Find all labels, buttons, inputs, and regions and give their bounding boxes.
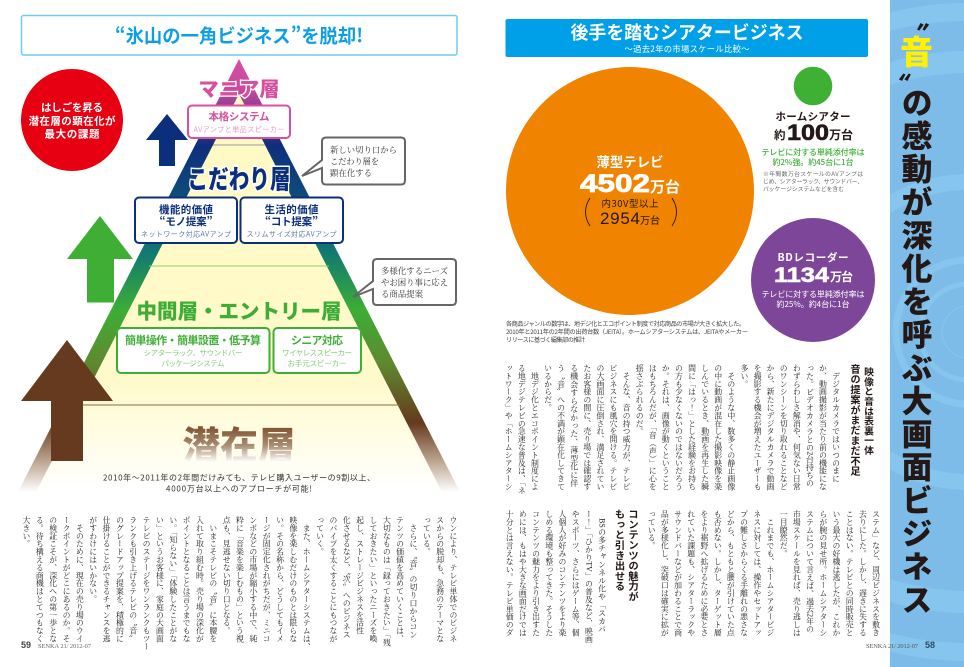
box: serious systems: 本格システム (208, 109, 270, 124)
circle: home theater: テレビに対する単純添付率は (762, 147, 864, 158)
body text: left page columns: また、ホームシアターシステムは、 (302, 524, 311, 650)
body text: left page columns: 化させるなど、〝次〟へのビジネス (342, 516, 351, 638)
red circle callout: はしごを昇る (41, 100, 103, 115)
body text: left page columns: の検証こそが、深化への第一歩とな (49, 516, 58, 642)
circle: bd recorder (751, 218, 875, 342)
title box: iceberg (22, 16, 457, 55)
body text: right page lower columns: れていた課題も、シアターラックや (687, 510, 696, 636)
body text: right page lower columns: サウンドバーなどが加わることで商 (674, 510, 683, 636)
page footer right (866, 640, 935, 650)
body text: right page upper columns: る地デジテレビの急速な普及は、「ネ (517, 364, 526, 494)
circle: flat tv: 4502 (580, 170, 650, 198)
body text: left page columns: い」というお客様に、家庭の大画面 (155, 516, 164, 642)
body text: right page lower columns: 一目瞭然だ。 (779, 510, 788, 557)
red circle callout: 潜在層の顕在化が (28, 114, 116, 128)
body text: right page lower columns: ステムについて言えば、過去2年の (806, 510, 815, 633)
box: lifestyle value: 生活的価値 (264, 202, 319, 217)
body text: right page lower columns after subheading: コンテンツの魅力をより引き出すた (532, 510, 541, 636)
circle: home theater: ホームシアター (776, 109, 850, 124)
headline remainder: の感動が深化を呼ぶ大画面ビジネス (894, 87, 940, 615)
callout: diverse needs (353, 259, 456, 305)
home theater footnote: じめ、シアターラック、サウンドバー、 (763, 176, 863, 186)
box: functional value: “モノ提案” (160, 214, 212, 229)
body text: right page upper columns: の大画面に圧倒され、満足されてい (596, 364, 605, 490)
page footer right: SENKA 21/ 2012-07 (866, 643, 919, 650)
chart source note: リリースに基づく編集部の推計 (506, 335, 585, 344)
circle: flat tv: 万台 (640, 212, 660, 227)
callout: diverse needs: る商品提案 (381, 288, 424, 300)
body text: right page upper columns: の中に動画が混在した撮影映像を楽 (714, 364, 723, 490)
circle: flat tv: 薄型テレビ (596, 151, 664, 171)
body text: right page upper columns: そのような中、数多くの静止画像 (727, 372, 736, 490)
body text: left page columns: ンポなどの市場が縮小する中で、純 (249, 516, 258, 642)
box: seniors: お手元スピーカー (288, 358, 346, 369)
body text: right page upper columns: か、動画撮影が当たり前の機能にな (818, 364, 828, 490)
body text: right page lower columns after subheading: めには、もはや大きな画面だけでは (518, 510, 527, 636)
chart source note: 2010年と2011年の2年間の出荷台数（JEITA）。ホームシアターシステムは、JEITAやメーカー (506, 327, 748, 336)
body text: left page columns: ランクも引き上げるテレビの〝音〟 (129, 516, 138, 642)
body text: left page columns: 大きい。 (22, 516, 31, 548)
circle: home theater: 万台 (829, 126, 853, 143)
subheading: image and sound: 音の提案がまだまだ不足 (848, 364, 863, 476)
chart source note (506, 319, 748, 344)
body text: right page lower columns: どから、もともと腰が引けていた点 (726, 510, 735, 636)
body text: left page columns: スからの脱却も、急務のテーマとな (436, 516, 445, 642)
box: lifestyle value: スリムサイズ対応AVアンプ (246, 230, 336, 240)
body text: left page columns: 点も、見逃せない切り口となる。 (222, 516, 231, 634)
title box: theater business (506, 19, 868, 57)
body text: left page columns: る。待ち構える商機はとてつもなく (35, 516, 44, 642)
title box: theater business: 後手を踏むシアタービジネス (570, 19, 804, 45)
circle: bd recorder: 万台 (830, 268, 853, 285)
page footer right: 58 (925, 640, 935, 650)
body text: right page upper columns: か。それは、画像が動くということ (661, 364, 670, 490)
subheading: image and sound (848, 364, 876, 476)
body text: right page lower columns: これまでも、ホームシアタービジ (766, 518, 775, 636)
body text: right page lower columns: ネスに対しては、操作やセットアッ (753, 510, 762, 636)
body text: right page upper columns (504, 364, 841, 494)
box: easy operation: 簡単操作・簡単設置・低予算 (125, 332, 261, 348)
body text: right page upper columns: る機会すらなかった、薄型化に伴 (570, 364, 579, 487)
circle: bd recorder: テレビに対する単純添付率は (762, 289, 864, 300)
box: easy operation: パッケージシステム (162, 358, 224, 369)
body text: left page columns: 入れて取り組む時。売り場の深化が (195, 516, 204, 642)
title box: theater business: ～過去2年の市場スケール比較～ (624, 43, 750, 55)
circle: flat tv: 内30V型以上 (602, 196, 659, 210)
closing quote mark: 〟 (893, 73, 930, 99)
body text: right page lower columns after subheading: 十分とは言えない。テレビ単価のダ (505, 510, 514, 636)
body text: left page columns: 粋に「音楽を楽しむもの」という視 (236, 516, 244, 642)
red circle callout (21, 69, 123, 171)
body text: right page lower columns: も否めない。しかし、ターゲット層 (713, 510, 722, 636)
body text: right page lower columns: っている。 (647, 510, 656, 550)
body text: right page upper columns: 多い。 (740, 364, 749, 388)
body text: left page columns: っていく。 (316, 516, 325, 556)
callout: diverse needs: 多様化するニーズ (381, 265, 448, 277)
callout: new angle: こだわり層を (330, 156, 379, 168)
body text: right page lower columns: 品が多様化し、突破口は確実に拡が (660, 510, 669, 636)
circle: home theater: 約2%強。約45台に1台 (772, 157, 854, 168)
layer heading: latent: 潜在層 (182, 415, 296, 470)
body text: right page lower columns after subheading: しめる環境も整ってきた。そうした (545, 510, 554, 636)
body text: right page lower columns: らが腕の見せ所。ホームシアターシ (819, 510, 828, 636)
body text: right page lower columns after subheading: ー！」「ひかりTV」の普及など、映画 (584, 510, 593, 643)
body text: left page columns: っている。 (422, 516, 431, 556)
body text: right page upper columns: を撮影する機会が増えたユーザーも (753, 364, 762, 490)
red circle callout: 最大の課題 (44, 126, 100, 142)
box: functional value: ネットワーク対応AVアンプ (141, 230, 231, 240)
body text: right page upper columns: の方も少なくないのではないだろう (674, 364, 683, 490)
body text: left page columns: そのために、現在の売り場のウイ (75, 524, 84, 642)
body text: left page columns: のパイプを太くすることにもつなが (329, 516, 338, 642)
box: easy operation (117, 328, 270, 373)
body text: right page upper columns: 揺さぶられるのだ。 (635, 364, 644, 435)
body text: left page columns: さらに、〝音〟の切り口からコン (409, 524, 418, 638)
body text: right page lower columns after subheading: 人個人が好みのコンテンツをより楽 (558, 510, 567, 636)
sidebar background (890, 0, 964, 667)
body text: right page upper columns: はもちろんだが、「音（声）」に心を (648, 364, 657, 490)
circle: flat tv (506, 67, 754, 315)
body text: right page lower columns after subheading: やスポーツ、さらにはゲーム等、個 (571, 510, 580, 636)
box: functional value (135, 198, 237, 243)
body text: left page columns (22, 516, 458, 650)
arrow: navy up (146, 114, 188, 166)
page footer left: SENKA 21/ 2012-07 (38, 643, 92, 650)
box: seniors: ワイヤレススピーカー (282, 348, 352, 358)
body text: right page upper columns: ビジネスにも風穴を開ける。テレビ (609, 364, 618, 490)
box: functional value: 機能的価値 (159, 202, 214, 217)
subheading: content appeal (612, 509, 641, 602)
body text: left page columns: 映像を楽しむだけのものとは限らな (289, 516, 298, 642)
home theater footnote (763, 169, 863, 193)
circle: home theater (762, 67, 864, 168)
body text: left page columns: テレビのステージをワンランクもツー (142, 516, 151, 650)
box: easy operation: シアターラック、サウンドバー (144, 348, 242, 358)
layer heading: kodawari: こだわり層 (188, 160, 290, 196)
circle: bd recorder: 1134 (774, 264, 829, 287)
body text: right page upper columns: のワンシーンを切り取れることなど (779, 364, 788, 490)
subheading: content appeal: もっと引き出せる (612, 509, 628, 591)
body text: left page columns: しておきたい」といったニーズを喚 (369, 516, 378, 642)
body text: left page columns: 大切なものは「録っておきたい」「残 (382, 516, 391, 646)
body text: right page upper columns: たお客様の間に、売り場では確認す (583, 364, 592, 490)
body text: right page lower columns: ことはない。テレビとの同時販売と (845, 510, 854, 636)
body text: right page lower columns (647, 510, 881, 636)
box: serious systems: AVアンプと単品スピーカー (194, 125, 284, 135)
body text: right page lower columns after subheading (505, 510, 607, 643)
body text: right page lower columns: いう最大の好機は逃したが、これか (832, 510, 841, 636)
body text: right page upper columns: わずらわしさ解消や、何気ない日常 (792, 364, 801, 490)
body text: left page columns: ポイントとなることは言うまでもな (182, 516, 191, 642)
box: seniors (274, 328, 361, 373)
body text: right page upper columns: いるからだ。 (544, 364, 553, 411)
page footer left: 59 (21, 640, 31, 650)
body text: right page upper columns: しんでいるとき、動画を再生した瞬 (701, 364, 710, 490)
latent layer note: 4000万台以上へのアプローチが可能! (166, 484, 312, 494)
body text: left page columns: い。その名称から、どうしてもイメ (276, 516, 285, 642)
sidebar title (892, 5, 940, 615)
highlighted word: sound: 音 (892, 35, 940, 68)
body text: right page lower columns: ステム」など、周辺ビジネスを敷き (872, 510, 881, 636)
body text: left page columns: い。「知らない」「体験したことがな (169, 516, 178, 642)
subheading: image and sound: 映像と音は表裏一体 (862, 367, 876, 455)
body text: right page lower columns: をより裾野へ拡げるために必要とさ (700, 510, 709, 636)
layer heading: mania: マニア層 (198, 73, 280, 102)
page footer left (21, 640, 92, 650)
body text: right page upper columns: デジタルカメラではいつのまに (832, 372, 841, 482)
latent layer note (103, 472, 375, 494)
body text: left page columns: 起し、ストレージビジネスを活性 (356, 516, 365, 634)
body text: left page columns: ウンにより、テレビ単体でのビジネ (449, 516, 458, 642)
body text: right page lower columns: プの難しさからくる手離れの悪さな (740, 510, 749, 636)
opening quote mark: 〝 (898, 5, 935, 31)
pyramid body (18, 59, 460, 492)
body text: left page columns: ージが固定化されがちだが、ミニコ (262, 516, 271, 642)
subheading: content appeal: コンテンツの魅力が (626, 509, 641, 602)
box: lifestyle value (240, 198, 343, 243)
body text: left page columns: がすわけにはいかない。 (89, 516, 98, 603)
body text: left page columns: いまこそテレビの〝音〟に本腰を (209, 524, 218, 642)
body text: left page columns: テンツの価値を高めていくことは、 (396, 516, 405, 642)
box: lifestyle value: “コト提案” (265, 214, 318, 229)
home theater footnote: ※年間数万台スケールのAVアンプは (763, 169, 863, 178)
body text: right page upper columns: う〝音〟への不満が顕在化してきて (557, 364, 566, 490)
body text: right page upper columns: った。ビデオカメラとの2台持ちの (805, 364, 814, 487)
circle: bd recorder: 約25%。約4台に1台 (776, 299, 850, 310)
callout: diverse needs: やお困り事に応え (381, 276, 448, 288)
body text: right page upper columns: 間に「はっ！」とした経験をお持ち (688, 364, 697, 490)
body text: left page columns: 仕掛けることができるチャンスを逃 (102, 516, 111, 642)
circle: home theater: 約 (774, 127, 786, 143)
title box: iceberg: “氷山の一角ビジネス”を脱却! (115, 22, 363, 48)
arrow: green up (67, 216, 133, 302)
body text: right page lower columns after subheading: BSの多チャンネル化や「スカパ (598, 518, 607, 633)
arrow: brown up (21, 340, 113, 461)
circle: home theater: 100 (787, 120, 829, 145)
body text: right page upper columns: ットワーク」や「ホームシアターシ (504, 364, 513, 490)
circle: flat tv: 2954 (600, 209, 640, 228)
chart source note: 各商品ジャンルの数字は、地デジ化とエコポイント制度で対応商品の市場が大きく拡大した。 (506, 319, 745, 328)
body text: right page lower columns: 市場スケールを見れば、売り逃しは (792, 510, 801, 636)
latent layer note: 2010年～2011年の2年間だけみても、テレビ購入ユーザーの9割以上、 (103, 472, 375, 484)
box: serious systems (188, 106, 290, 138)
circle: bd recorder: BDレコーダー (778, 250, 848, 265)
home theater footnote: パッケージシステムなどを含む (763, 184, 844, 193)
body text: right page lower columns: 去りにした。しかし、遅きに失する (858, 510, 867, 636)
circle: flat tv: 万台 (650, 176, 680, 197)
layer heading: middle / entry: 中間層・エントリー層 (136, 294, 342, 324)
body text: right page upper columns: 地デジ化とエコポイント制度によ (530, 372, 539, 490)
body text: left page columns: ークポイントがどこにあるのか。そ (62, 516, 71, 642)
box: seniors: シニア対応 (291, 332, 343, 348)
callout: new angle (302, 138, 405, 184)
body text: right page upper columns: そんな、音の持つ威力が、テレビ (622, 372, 631, 490)
body text: left page columns: のグレードアップ提案を、積極的に (115, 516, 124, 642)
callout: new angle: 顕在化する (330, 167, 372, 179)
callout: new angle: 新しい切り口から (330, 144, 397, 156)
body text: right page upper columns: から、新たにデジタルカメラで動画 (766, 364, 775, 490)
